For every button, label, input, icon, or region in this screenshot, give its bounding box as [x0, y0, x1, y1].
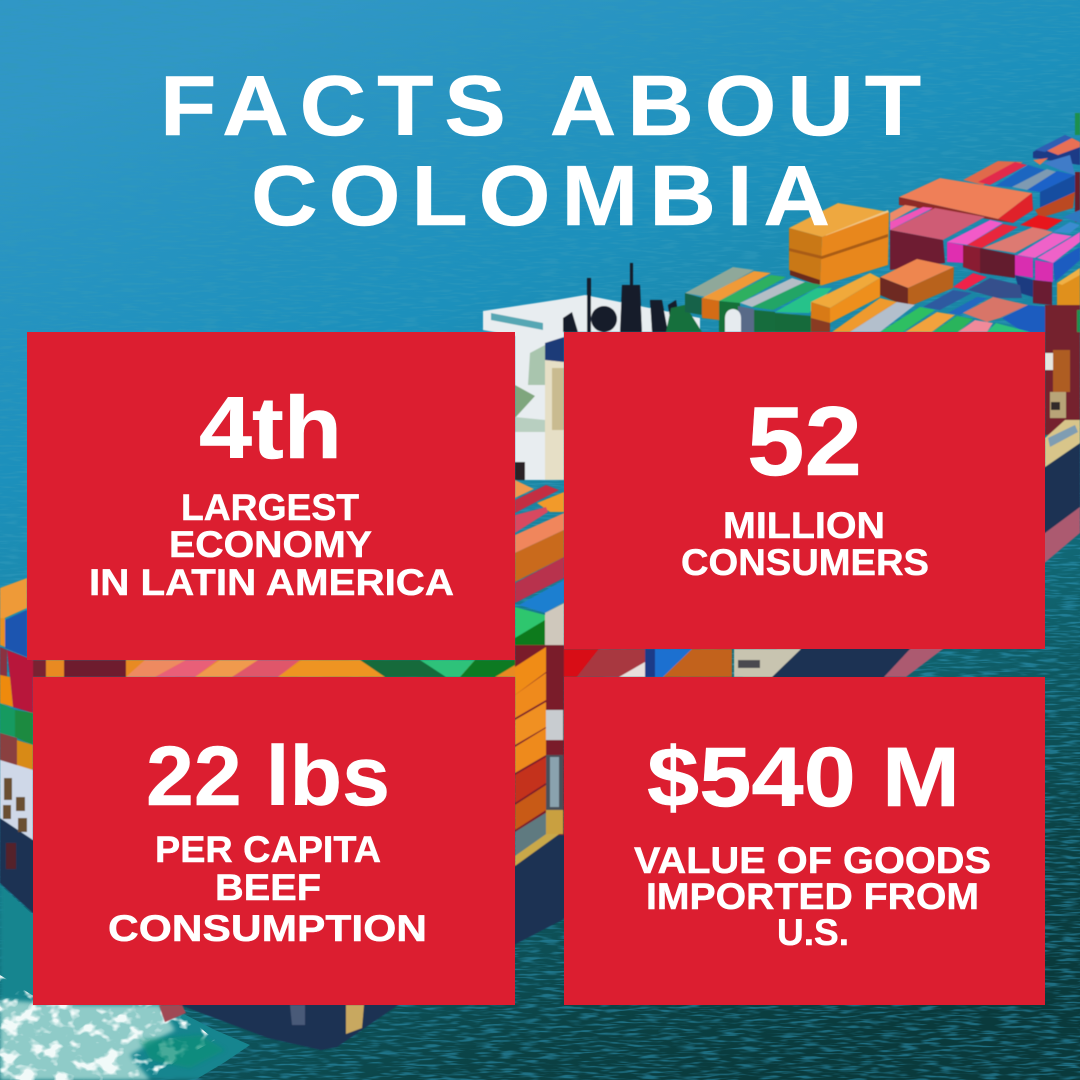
title: FACTS ABOUT — [160, 59, 932, 154]
big number: 4th: 4th — [199, 378, 342, 477]
description: per capita beef consumption: CONSUMPTION — [108, 908, 427, 949]
orange container stack — [789, 203, 889, 237]
description: per capita beef consumption: BEEF — [215, 867, 321, 908]
upper right red and blue containers — [963, 161, 1023, 185]
panel: $540 M goods imported — [564, 677, 1045, 1005]
title — [160, 59, 932, 244]
lower centre containers — [515, 645, 564, 835]
front deck strip — [832, 298, 897, 332]
big number: 52: 52 — [747, 386, 862, 496]
right side containers — [1045, 305, 1080, 435]
big number: $540 M: $540 M — [647, 730, 960, 824]
description: per capita beef consumption — [108, 829, 427, 949]
panel: 22 lbs beef consumption — [33, 677, 515, 1005]
big number: 22 lbs: 22 lbs — [146, 729, 390, 823]
description: value of goods imported from U.S.: VALUE OF GOODS — [634, 840, 991, 881]
pink and magenta container rows — [890, 205, 917, 222]
bridge silhouette and mast — [563, 263, 680, 332]
description: value of goods imported from U.S.: U.S. — [777, 912, 849, 953]
description: largest economy in Latin America — [89, 487, 454, 603]
mid deck containers — [953, 273, 987, 290]
description: largest economy in Latin America: ECONOMY — [169, 524, 372, 565]
description: million consumers: MILLION — [723, 505, 885, 546]
ship wake foam — [0, 880, 260, 1080]
description: value of goods imported from U.S. — [634, 840, 991, 953]
description: million consumers: CONSUMERS — [681, 542, 929, 583]
white superstructure — [483, 295, 700, 480]
near row of containers — [666, 305, 702, 332]
panel: 52 million consumers — [564, 332, 1045, 649]
title: COLOMBIA — [251, 149, 841, 244]
description: largest economy in Latin America: IN LATIN AMERICA — [89, 562, 454, 603]
orange block near — [811, 273, 880, 308]
panel: 4th largest economy — [27, 332, 515, 660]
strip between left panels — [27, 660, 515, 677]
description: million consumers — [681, 505, 929, 583]
centre column containers — [515, 480, 534, 498]
description: per capita beef consumption: PER CAPITA — [155, 829, 381, 870]
description: value of goods imported from U.S.: IMPORTED FROM — [646, 876, 979, 917]
coral container block — [899, 178, 1032, 219]
left side containers — [0, 578, 27, 620]
strip between right panels — [564, 649, 599, 677]
ship hull — [0, 443, 1080, 1050]
red waterline stripe — [884, 507, 1080, 677]
description: largest economy in Latin America: LARGEST — [181, 487, 359, 528]
coral block mid — [880, 259, 954, 288]
